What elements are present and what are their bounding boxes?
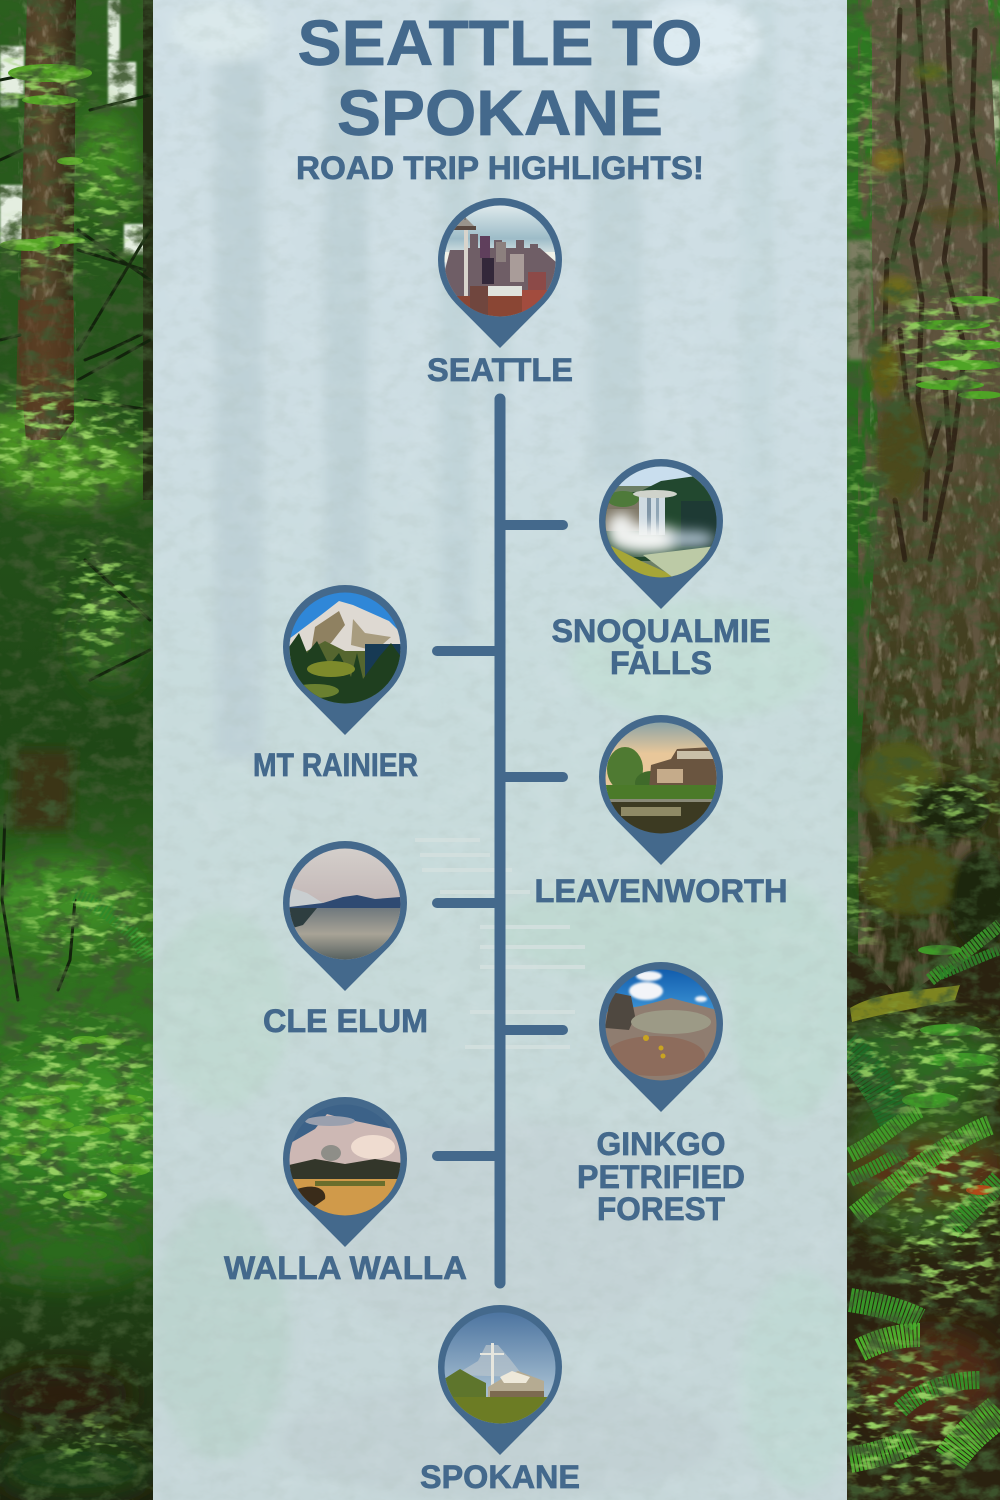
pin: Leavenworth (599, 715, 723, 865)
label: Snoqualmie Falls (552, 613, 770, 681)
light green canopy glow (0, 110, 170, 1498)
pin: Mt Rainier (283, 585, 407, 735)
dark branches (0, 75, 150, 1000)
pin: Ginkgo Petrified Forest (599, 962, 723, 1112)
subtitle: ROAD TRIP HIGHLIGHTS! (296, 150, 704, 186)
title line 2: SPOKANE (337, 77, 663, 149)
pin: Seattle (438, 198, 562, 348)
label: Snoqualmie Falls: FALLS (610, 645, 712, 681)
bark furrows (884, 0, 985, 560)
bright leaves on right trunk (910, 296, 1000, 399)
label: Snoqualmie Falls: SNOQUALMIE (552, 613, 770, 649)
label: Ginkgo Petrified Forest: FOREST (597, 1191, 725, 1227)
pin: Spokane (438, 1305, 562, 1455)
title line 1: SEATTLE TO (298, 7, 702, 79)
translucent centre panel (153, 0, 847, 1500)
fern: left (75, 895, 150, 960)
right tree trunk (858, 0, 1000, 1000)
broad leaves right (902, 945, 998, 1108)
label: Cle Elum: CLE ELUM (263, 1003, 428, 1039)
label: Mt Rainier: MT RAINIER (253, 747, 418, 783)
title (296, 7, 704, 186)
label: Leavenworth: LEAVENWORTH (534, 873, 788, 909)
right strip base (847, 0, 1000, 975)
label: Ginkgo Petrified Forest: PETRIFIED (577, 1159, 745, 1195)
ferns right (845, 925, 1000, 1460)
label: Seattle: SEATTLE (427, 352, 573, 388)
bright leaf sprays (0, 64, 150, 1201)
far right dark trunk (143, 0, 153, 500)
label: Spokane: SPOKANE (420, 1459, 580, 1495)
pin: Snoqualmie Falls (599, 459, 723, 609)
label: Walla Walla: WALLA WALLA (224, 1250, 467, 1286)
under-panel forest (150, 0, 860, 1500)
moss patches (860, 64, 1000, 950)
pin: Cle Elum (283, 841, 407, 991)
forest floor right (847, 950, 1000, 1500)
left tree trunk (18, 0, 76, 440)
timeline route line (437, 399, 563, 1283)
sky gaps (0, 0, 144, 254)
label: Ginkgo Petrified Forest (577, 1126, 745, 1227)
mossy log (850, 985, 960, 1022)
label: Ginkgo Petrified Forest: GINKGO (596, 1126, 726, 1162)
pin: Walla Walla (283, 1097, 407, 1247)
